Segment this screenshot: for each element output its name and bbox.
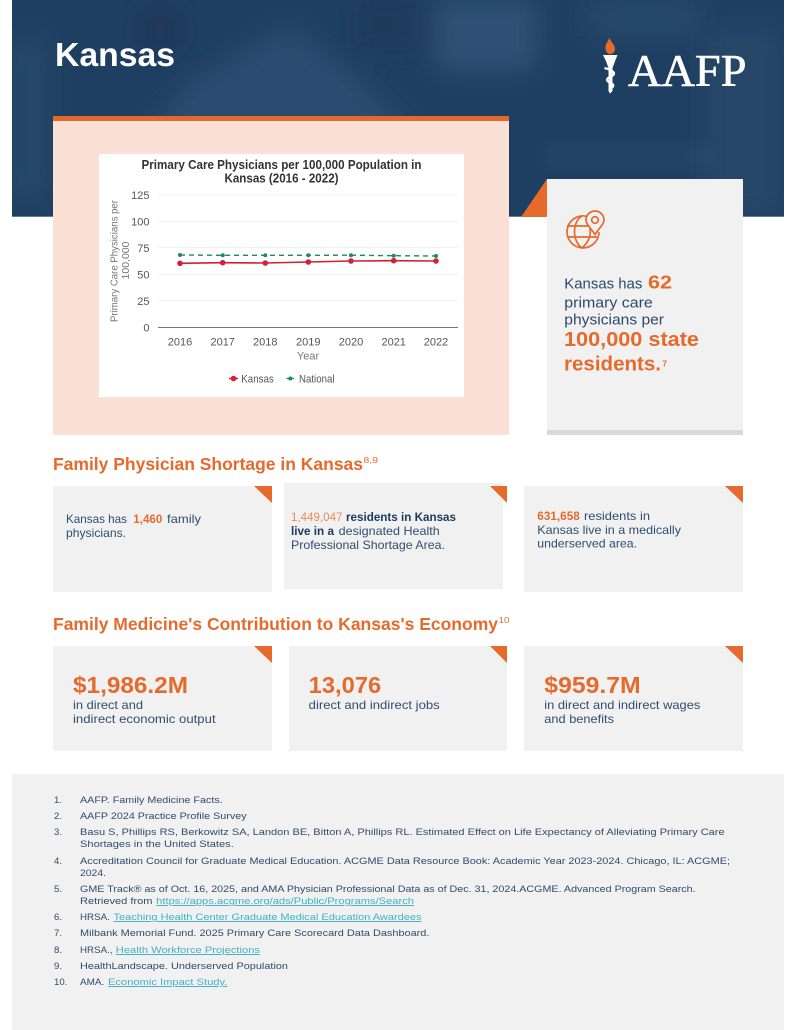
reference 10: AMA. (80, 977, 104, 988)
callout text: residents. (564, 354, 661, 376)
state title: Kansas (55, 36, 175, 73)
reference 4: 4. (54, 856, 62, 867)
AAFP logo: AAFP (628, 46, 746, 96)
reference 8: HRSA., (80, 945, 112, 956)
icon: globe with location pin (567, 211, 604, 248)
panel: physician rate callout (521, 179, 743, 435)
reference 7: Milbank Memorial Fund. 2025 Primary Care Scorecard Data Dashboard. (80, 928, 429, 939)
reference 9: HealthLandscape. Underserved Population (80, 961, 288, 972)
card: shortage area residents: designated Health (339, 524, 440, 538)
heading: family physician shortage: Family Physician Shortage in Kansas (53, 454, 363, 474)
header banner with blurred photo background (12, 0, 784, 217)
card: wages and benefits: and benefits (544, 712, 614, 726)
callout text: primary care (564, 294, 653, 311)
reference 10 (54, 977, 227, 988)
x axis labels (168, 336, 448, 348)
callout text: Kansas has (564, 275, 642, 292)
heading: economic contribution: Family Medicine's Contribution to Kansas's Economy (53, 614, 498, 634)
callout text: 7 (662, 360, 668, 368)
reference 6: HRSA. (80, 912, 110, 923)
reference 3: Shortages in the United States. (80, 839, 234, 850)
card: medically underserved residents: underserved area. (537, 536, 637, 550)
callout text: 62 (648, 272, 672, 292)
reference 7: 7. (54, 928, 62, 939)
y axis labels: 25 (137, 296, 150, 308)
chart legend: National (299, 373, 334, 385)
reference 5: https://apps.acgme.org/ads/Public/Programs/Search (156, 896, 414, 907)
heading: economic contribution: 10 (498, 615, 510, 625)
x axis labels: 2017 (210, 336, 235, 348)
reference 6: 6. (54, 912, 62, 923)
card: economic output (53, 646, 272, 751)
chart legend: Kansas (241, 373, 274, 385)
card: wages and benefits (524, 646, 743, 751)
reference 3: 3. (54, 827, 62, 838)
national series (178, 253, 438, 258)
chart legend (229, 373, 334, 385)
reference 8: 8. (54, 945, 62, 956)
reference 8 (54, 945, 260, 956)
callout text: physicians per (564, 311, 664, 328)
card: jobs: direct and indirect jobs (309, 698, 440, 712)
heading: family physician shortage: 8,9 (364, 455, 378, 465)
card: family physicians count (53, 486, 272, 592)
reference 4: Accreditation Council for Graduate Medical Education. ACGME Data Resource Book: Academic Year 2023-2024. Chicago, IL: ACGME; (80, 856, 730, 867)
card: shortage area residents: 1,449,047 (291, 510, 342, 524)
y axis title: Primary Care Physicians per (108, 200, 120, 322)
x axis labels: 2022 (424, 336, 448, 348)
reference 10: Economic Impact Study. (108, 977, 227, 988)
y axis labels: 75 (137, 243, 150, 255)
chart title: Kansas (2016 - 2022) (224, 172, 338, 186)
reference 5: 5. (54, 884, 62, 895)
x axis labels: 2016 (168, 336, 192, 348)
x axis title: Year (297, 350, 319, 362)
reference 9: 9. (54, 961, 62, 972)
AAFP logo (603, 38, 746, 96)
card: medically underserved residents: Kansas live in a medically (537, 523, 681, 537)
reference 5: Retrieved from (80, 896, 152, 907)
reference 6: Teaching Health Center Graduate Medical Education Awardees (114, 912, 422, 923)
card: wages and benefits: $959.7M (544, 672, 641, 698)
y axis labels: 100 (131, 216, 150, 228)
reference 1: AAFP. Family Medicine Facts. (80, 795, 223, 806)
x axis labels: 2019 (296, 336, 321, 348)
card: jobs (289, 646, 507, 751)
card: shortage area residents: live in a (291, 524, 334, 538)
card: jobs: 13,076 (309, 672, 381, 698)
callout text (564, 272, 699, 376)
card: economic output: $1,986.2M (73, 672, 188, 698)
card: economic output: indirect economic output (73, 712, 216, 726)
card: shortage area residents: residents in Kansas (346, 510, 456, 524)
callout text: 100,000 state (564, 329, 699, 351)
card: shortage area residents: Professional Shortage Area. (291, 538, 445, 552)
line chart: primary care physicians per 100,000 (99, 154, 464, 397)
y axis labels: 50 (137, 270, 150, 282)
card: shortage area residents (284, 483, 507, 589)
reference 4: 2024. (80, 868, 106, 879)
panel: references (12, 774, 784, 1030)
card: economic output: in direct and (73, 698, 143, 712)
reference 10: 10. (54, 977, 67, 988)
card: medically underserved residents (524, 486, 743, 592)
card: family physicians count: 1,460 (133, 512, 163, 526)
card: family physicians count: Kansas has (66, 512, 127, 526)
reference 8: Health Workforce Projections (116, 945, 260, 956)
reference 2: 2. (54, 811, 62, 822)
y axis labels: 0 (143, 322, 150, 334)
y axis title (108, 200, 132, 322)
chart title: Primary Care Physicians per 100,000 Population in (142, 158, 422, 172)
reference 5: GME Track® as of Oct. 16, 2025, and AMA Physician Professional Data as of Dec. 31, 2024.ACGME. Advanced Program Search. (80, 884, 696, 895)
card: family physicians count: family (167, 512, 201, 526)
reference 2: AAFP 2024 Practice Profile Survey (80, 811, 247, 822)
y axis title: 100,000 (120, 241, 132, 279)
card: wages and benefits: in direct and indirect wages (544, 698, 700, 712)
kansas series (177, 258, 439, 266)
reference 5 (54, 884, 696, 907)
x axis labels: 2021 (381, 336, 406, 348)
reference 1: 1. (54, 795, 62, 806)
x axis labels: 2018 (253, 336, 278, 348)
card: medically underserved residents: 631,658 (537, 509, 580, 523)
card: family physicians count: physicians. (66, 526, 126, 540)
y axis labels: 125 (131, 190, 150, 202)
reference 4 (54, 856, 730, 879)
x axis labels: 2020 (339, 336, 363, 348)
reference 3 (54, 827, 725, 850)
y axis labels (131, 190, 150, 334)
reference 3: Basu S, Phillips RS, Berkowitz SA, Landon BE, Bitton A, Phillips RL. Estimated Effect on Life Expectancy of Alleviating Primary Care (80, 827, 725, 838)
panel: primary care chart (53, 116, 509, 435)
chart title (142, 158, 422, 186)
card: medically underserved residents: residents in (584, 509, 650, 523)
icon: torch with flame and snake (603, 38, 618, 94)
